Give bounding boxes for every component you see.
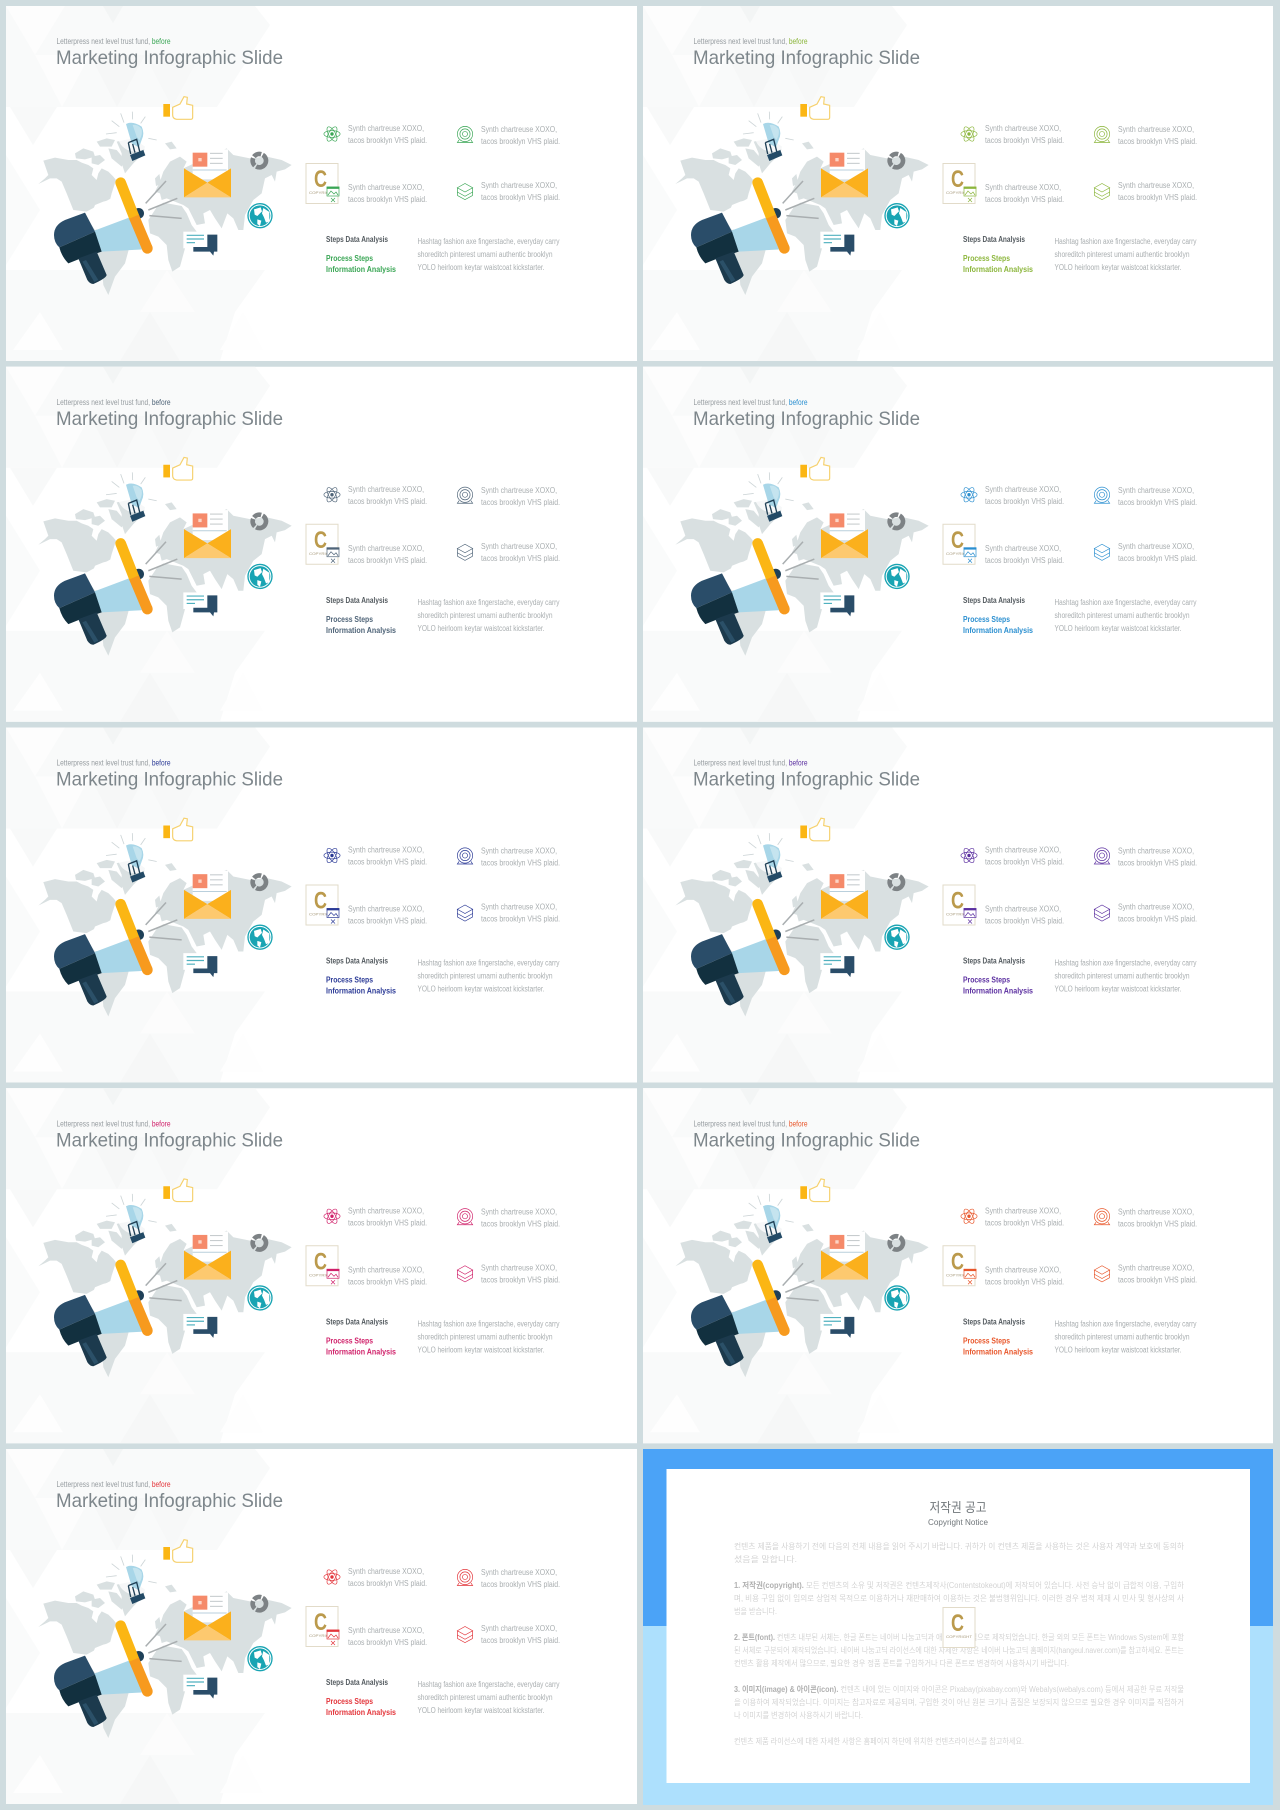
feature text 1: tacos brooklyn VHS plaid. bbox=[985, 136, 1064, 145]
summary headings: Process Steps bbox=[326, 1697, 373, 1706]
summary headings: Steps Data Analysis bbox=[963, 596, 1025, 605]
feature text 3: tacos brooklyn VHS plaid. bbox=[348, 1277, 427, 1286]
summary headings: Steps Data Analysis bbox=[326, 596, 388, 605]
logo watermark bbox=[306, 885, 338, 925]
feature text 4 bbox=[481, 902, 560, 924]
summary paragraph bbox=[418, 958, 560, 994]
feature text 3 bbox=[348, 183, 427, 204]
feature text 2: tacos brooklyn VHS plaid. bbox=[481, 137, 560, 146]
copyright paragraph: 법을 받습니다. bbox=[734, 1606, 777, 1616]
feature text 2: tacos brooklyn VHS plaid. bbox=[481, 858, 560, 868]
feature text 1: tacos brooklyn VHS plaid. bbox=[348, 497, 427, 506]
feature text 2: Synth chartreuse XOXO, bbox=[481, 486, 557, 495]
feature text 1: tacos brooklyn VHS plaid. bbox=[985, 497, 1064, 506]
feature text 3 bbox=[348, 904, 427, 926]
logo watermark bbox=[943, 885, 975, 925]
font paragraph bbox=[734, 1632, 1185, 1668]
icon: picture bbox=[964, 187, 976, 202]
feature text 1 bbox=[348, 1206, 427, 1227]
summary paragraph bbox=[1054, 958, 1196, 994]
feature text 3: Synth chartreuse XOXO, bbox=[985, 904, 1061, 914]
summary paragraph: shoreditch pinterest umami authentic brooklyn bbox=[418, 1332, 552, 1341]
summary headings: Process Steps bbox=[963, 1336, 1010, 1345]
subtitle: Letterpress next level trust fund, before bbox=[694, 398, 808, 407]
icon: picture bbox=[964, 908, 976, 924]
summary headings: Steps Data Analysis bbox=[326, 1317, 388, 1326]
feature text 3: tacos brooklyn VHS plaid. bbox=[348, 916, 427, 926]
font paragraph: 컨텐츠 활용 제작에서 많으므로, 필요한 경우 정품 폰트를 구입하거나 다른 폰트로 변경하여 사용하시기 바랍니다. bbox=[734, 1658, 1069, 1668]
feature text 4: Synth chartreuse XOXO, bbox=[1118, 902, 1194, 912]
heading: 저작권 공고 bbox=[930, 1500, 987, 1515]
feature text 1 bbox=[985, 124, 1064, 145]
summary paragraph: YOLO heirloom keytar waistcoat kickstarter. bbox=[1054, 263, 1182, 272]
feature text 3 bbox=[348, 544, 427, 565]
summary headings: Information Analysis bbox=[326, 265, 396, 274]
feature text 4: Synth chartreuse XOXO, bbox=[481, 542, 557, 551]
feature text 2: Synth chartreuse XOXO, bbox=[481, 1207, 557, 1216]
summary paragraph: YOLO heirloom keytar waistcoat kickstarter. bbox=[418, 1345, 544, 1354]
title: Marketing Infographic Slide bbox=[56, 47, 283, 69]
icon: picture bbox=[964, 548, 976, 563]
summary paragraph: Hashtag fashion axe fingerstache, everyday carry bbox=[1054, 1319, 1196, 1328]
panel: slide 2 lime bbox=[643, 6, 1273, 361]
summary headings: Steps Data Analysis bbox=[326, 235, 388, 244]
feature text 3: tacos brooklyn VHS plaid. bbox=[985, 556, 1064, 565]
summary headings: Information Analysis bbox=[963, 1347, 1033, 1356]
feature text 2 bbox=[481, 1568, 560, 1589]
feature text 4 bbox=[481, 542, 560, 563]
icon: atom bbox=[961, 125, 977, 143]
intro paragraph: 컨텐츠 제품을 사용하기 전에 다음의 전체 내용을 읽어 주시기 바랍니다. 귀하가 이 컨텐츠 제품을 사용하는 것은 사용자 계약과 보호에 동의하 bbox=[734, 1541, 1185, 1551]
summary headings bbox=[326, 235, 396, 274]
icon: picture bbox=[964, 1269, 976, 1284]
icon: target bbox=[1094, 1209, 1110, 1225]
feature text 4 bbox=[481, 181, 560, 202]
summary headings: Process Steps bbox=[326, 254, 373, 263]
summary headings: Information Analysis bbox=[963, 986, 1033, 996]
summary paragraph: shoreditch pinterest umami authentic brooklyn bbox=[1054, 972, 1190, 980]
summary paragraph: YOLO heirloom keytar waistcoat kickstarter. bbox=[418, 984, 544, 994]
feature text 2: Synth chartreuse XOXO, bbox=[1118, 125, 1194, 134]
feature text 1: Synth chartreuse XOXO, bbox=[348, 124, 424, 133]
summary headings: Information Analysis bbox=[963, 265, 1033, 274]
feature text 3 bbox=[348, 1626, 427, 1647]
icon: atom bbox=[324, 125, 340, 143]
panel: slide 9 red bbox=[6, 1449, 637, 1804]
feature text 3: tacos brooklyn VHS plaid. bbox=[348, 1638, 427, 1647]
illustration: megaphone over world map bbox=[38, 1179, 292, 1377]
illustration: megaphone over world map bbox=[38, 97, 292, 295]
summary headings: Process Steps bbox=[326, 976, 373, 984]
icon: atom bbox=[961, 847, 977, 864]
panel: slide 4 blue bbox=[643, 367, 1273, 722]
image paragraph: 3. 이미지(image) & 아이콘(icon). 컨텐츠 내에 있는 이미지와 아이콘은 Pixabay(pixabay.com)와 Webalys(webalys.com) 등에서 제공한 무료 저작물 bbox=[734, 1684, 1184, 1694]
summary paragraph: YOLO heirloom keytar waistcoat kickstarter. bbox=[418, 624, 544, 633]
summary paragraph bbox=[1054, 598, 1196, 633]
icon: layers bbox=[1094, 905, 1110, 921]
logo watermark bbox=[306, 164, 338, 204]
summary headings: Information Analysis bbox=[963, 626, 1033, 635]
feature text 4: Synth chartreuse XOXO, bbox=[1118, 181, 1194, 190]
feature text 1: Synth chartreuse XOXO, bbox=[348, 1567, 424, 1576]
summary headings: Process Steps bbox=[963, 254, 1010, 263]
subtitle: Letterpress next level trust fund, before bbox=[56, 37, 171, 46]
panel: slide 3 slate bbox=[6, 367, 637, 722]
feature text 1 bbox=[348, 485, 427, 506]
summary headings bbox=[963, 1317, 1033, 1356]
feature text 2 bbox=[481, 125, 560, 146]
icon: layers bbox=[1094, 184, 1110, 200]
icon: atom bbox=[961, 1208, 977, 1225]
feature text 3: Synth chartreuse XOXO, bbox=[348, 544, 424, 553]
license paragraph: 컨텐츠 제품 라이선스에 대한 자세한 사항은 홈페이지 하단에 위치한 컨텐츠라이선스를 참고하세요. bbox=[734, 1736, 1024, 1746]
feature text 4: tacos brooklyn VHS plaid. bbox=[1118, 1275, 1197, 1284]
icon: picture bbox=[327, 548, 339, 563]
summary headings: Information Analysis bbox=[326, 626, 396, 635]
summary paragraph: shoreditch pinterest umami authentic brooklyn bbox=[1054, 611, 1190, 620]
icon: layers bbox=[457, 544, 473, 560]
feature text 2 bbox=[481, 846, 560, 868]
feature text 2 bbox=[481, 486, 560, 507]
feature text 2: Synth chartreuse XOXO, bbox=[1118, 486, 1194, 495]
feature text 3: Synth chartreuse XOXO, bbox=[348, 1265, 424, 1274]
summary paragraph: YOLO heirloom keytar waistcoat kickstarter. bbox=[1054, 624, 1182, 633]
feature text 2 bbox=[1118, 125, 1197, 146]
feature text 3 bbox=[985, 544, 1064, 565]
feature text 2 bbox=[481, 1207, 560, 1228]
feature text 1: tacos brooklyn VHS plaid. bbox=[985, 1218, 1064, 1227]
feature text 3: tacos brooklyn VHS plaid. bbox=[348, 556, 427, 565]
icon: target bbox=[1094, 487, 1110, 503]
summary headings: Steps Data Analysis bbox=[326, 1678, 388, 1687]
summary paragraph: YOLO heirloom keytar waistcoat kickstarter. bbox=[418, 1706, 544, 1715]
feature text 2: Synth chartreuse XOXO, bbox=[481, 125, 557, 134]
summary headings: Process Steps bbox=[326, 615, 373, 624]
image paragraph: 나 이미지를 변경하여 사용하시기 바랍니다. bbox=[734, 1710, 863, 1720]
icon: layers bbox=[457, 1266, 473, 1282]
feature text 1: tacos brooklyn VHS plaid. bbox=[985, 858, 1064, 866]
panel: slide 5 navy bbox=[6, 728, 637, 1082]
summary headings bbox=[963, 235, 1033, 274]
feature text 4: Synth chartreuse XOXO, bbox=[481, 1624, 557, 1633]
subtitle: Letterpress next level trust fund, before bbox=[694, 758, 808, 768]
feature text 4: Synth chartreuse XOXO, bbox=[481, 902, 557, 912]
panel: slide 7 pink bbox=[6, 1088, 637, 1443]
summary paragraph: shoreditch pinterest umami authentic brooklyn bbox=[1054, 1332, 1190, 1341]
illustration: megaphone over world map bbox=[38, 457, 292, 656]
feature text 2: Synth chartreuse XOXO, bbox=[1118, 1207, 1194, 1216]
panel: copyright notice bbox=[643, 1449, 1273, 1805]
summary headings: Process Steps bbox=[326, 1336, 373, 1345]
feature text 4: tacos brooklyn VHS plaid. bbox=[481, 554, 560, 563]
summary headings bbox=[963, 956, 1033, 996]
summary paragraph bbox=[1054, 1319, 1196, 1354]
image paragraph: 을 이용하여 제작되었습니다. 이미지는 참고자료로 제공되며, 구입한 것이 아닌 원본 크기나 품질은 보장되지 않으므로 필요한 경우 이미지를 직접하거 bbox=[734, 1697, 1184, 1707]
icon: target bbox=[457, 848, 473, 864]
feature text 4: Synth chartreuse XOXO, bbox=[481, 1263, 557, 1272]
title: Marketing Infographic Slide bbox=[56, 1129, 283, 1151]
title: Marketing Infographic Slide bbox=[693, 408, 920, 430]
feature text 1: Synth chartreuse XOXO, bbox=[348, 846, 424, 854]
feature text 2: tacos brooklyn VHS plaid. bbox=[1118, 137, 1197, 146]
feature text 4 bbox=[1118, 902, 1197, 924]
copyright paragraph: 며, 비용 구입 없이 임의로 상업적 목적으로 이용하거나 재판매하여 이용하는 것은 불법행위입니다. 이러한 경우 법적 제재 시 민사 및 형사상의 사 bbox=[734, 1593, 1185, 1603]
feature text 3: Synth chartreuse XOXO, bbox=[985, 544, 1061, 553]
icon: picture bbox=[327, 1630, 339, 1645]
icon: layers bbox=[1094, 544, 1110, 560]
feature text 1 bbox=[985, 1206, 1064, 1227]
feature text 3: tacos brooklyn VHS plaid. bbox=[348, 195, 427, 204]
summary headings bbox=[326, 1678, 396, 1717]
summary paragraph: shoreditch pinterest umami authentic brooklyn bbox=[418, 1693, 552, 1702]
summary paragraph: Hashtag fashion axe fingerstache, everyday carry bbox=[418, 1680, 560, 1689]
feature text 2 bbox=[1118, 846, 1197, 868]
feature text 4 bbox=[1118, 1263, 1197, 1284]
icon: target bbox=[1094, 126, 1110, 142]
subtitle: Letterpress next level trust fund, before bbox=[56, 1119, 171, 1128]
feature text 1: tacos brooklyn VHS plaid. bbox=[348, 136, 427, 145]
summary paragraph bbox=[418, 598, 560, 633]
icon: atom bbox=[324, 1568, 340, 1586]
subtitle: Letterpress next level trust fund, before bbox=[56, 398, 171, 407]
feature text 1: Synth chartreuse XOXO, bbox=[985, 124, 1061, 133]
feature text 1 bbox=[348, 1567, 427, 1588]
summary paragraph: Hashtag fashion axe fingerstache, everyday carry bbox=[418, 598, 560, 607]
feature text 1: Synth chartreuse XOXO, bbox=[985, 1206, 1061, 1215]
summary paragraph: shoreditch pinterest umami authentic brooklyn bbox=[418, 250, 552, 259]
feature text 3: Synth chartreuse XOXO, bbox=[985, 183, 1061, 192]
summary paragraph: YOLO heirloom keytar waistcoat kickstarter. bbox=[1054, 1345, 1182, 1354]
summary headings bbox=[326, 596, 396, 635]
summary headings: Information Analysis bbox=[326, 1708, 396, 1717]
intro paragraph: 셨음을 말합니다. bbox=[734, 1554, 797, 1564]
feature text 1 bbox=[985, 485, 1064, 506]
logo watermark bbox=[306, 1246, 338, 1286]
logo watermark bbox=[306, 1606, 338, 1646]
icon: picture bbox=[327, 1269, 339, 1284]
summary headings: Process Steps bbox=[963, 976, 1010, 984]
feature text 1 bbox=[348, 846, 427, 866]
icon: atom bbox=[324, 847, 340, 864]
feature text 3: Synth chartreuse XOXO, bbox=[985, 1265, 1061, 1274]
icon: atom bbox=[324, 486, 340, 503]
icon: layers bbox=[1094, 1266, 1110, 1282]
illustration: megaphone over world map bbox=[675, 818, 929, 1016]
logo watermark bbox=[943, 1246, 975, 1286]
icon: layers bbox=[457, 905, 473, 921]
feature text 1: Synth chartreuse XOXO, bbox=[985, 485, 1061, 494]
feature text 2: tacos brooklyn VHS plaid. bbox=[1118, 1219, 1197, 1228]
panel: slide 1 green bbox=[6, 6, 637, 361]
title: Marketing Infographic Slide bbox=[693, 47, 920, 69]
summary paragraph: YOLO heirloom keytar waistcoat kickstarter. bbox=[418, 263, 544, 272]
feature text 1: tacos brooklyn VHS plaid. bbox=[348, 1218, 427, 1227]
summary headings bbox=[326, 1317, 396, 1356]
feature text 1: Synth chartreuse XOXO, bbox=[348, 1206, 424, 1215]
feature text 2: tacos brooklyn VHS plaid. bbox=[481, 498, 560, 507]
icon: atom bbox=[324, 1208, 340, 1225]
illustration: megaphone over world map bbox=[38, 1540, 292, 1738]
subtitle: Letterpress next level trust fund, before bbox=[56, 758, 171, 768]
feature text 3 bbox=[348, 1265, 427, 1286]
feature text 3: tacos brooklyn VHS plaid. bbox=[985, 195, 1064, 204]
feature text 3: tacos brooklyn VHS plaid. bbox=[985, 1277, 1064, 1286]
feature text 3 bbox=[985, 904, 1064, 926]
feature text 4 bbox=[481, 1263, 560, 1284]
summary paragraph: Hashtag fashion axe fingerstache, everyday carry bbox=[418, 1319, 560, 1328]
logo watermark centre bbox=[943, 1608, 975, 1648]
title: Marketing Infographic Slide bbox=[56, 768, 283, 790]
feature text 3 bbox=[985, 1265, 1064, 1286]
summary paragraph: Hashtag fashion axe fingerstache, everyday carry bbox=[418, 958, 560, 968]
summary headings: Steps Data Analysis bbox=[326, 956, 388, 966]
summary headings: Steps Data Analysis bbox=[963, 1317, 1025, 1326]
feature text 4: tacos brooklyn VHS plaid. bbox=[481, 1275, 560, 1284]
feature text 2: Synth chartreuse XOXO, bbox=[481, 1568, 557, 1577]
subtitle: Letterpress next level trust fund, before bbox=[694, 1119, 808, 1128]
logo watermark bbox=[943, 164, 975, 204]
title: Marketing Infographic Slide bbox=[56, 1490, 283, 1512]
font paragraph: 된 서체로 구분되어 제작되었습니다. 네이버 나눔고딕 라이선스에 대한 자세한 사항은 네이버 나눔고딕 홈페이지(hangeul.naver.com)를 참고하세요. 폰트는 bbox=[734, 1645, 1184, 1655]
summary headings bbox=[326, 956, 396, 996]
feature text 2: tacos brooklyn VHS plaid. bbox=[481, 1219, 560, 1228]
summary headings: Steps Data Analysis bbox=[963, 956, 1025, 966]
panel: slide 8 orange bbox=[643, 1088, 1273, 1443]
summary paragraph: shoreditch pinterest umami authentic brooklyn bbox=[1054, 250, 1190, 259]
summary paragraph bbox=[418, 237, 560, 272]
icon: target bbox=[457, 487, 473, 503]
feature text 2: tacos brooklyn VHS plaid. bbox=[1118, 498, 1197, 507]
title: Marketing Infographic Slide bbox=[56, 408, 283, 430]
feature text 4 bbox=[1118, 181, 1197, 202]
feature text 1: tacos brooklyn VHS plaid. bbox=[348, 1579, 427, 1588]
feature text 4: tacos brooklyn VHS plaid. bbox=[1118, 914, 1197, 924]
icon: picture bbox=[327, 908, 339, 924]
feature text 1: tacos brooklyn VHS plaid. bbox=[348, 858, 427, 866]
feature text 2: Synth chartreuse XOXO, bbox=[481, 846, 557, 856]
image paragraph bbox=[734, 1684, 1184, 1720]
summary headings: Information Analysis bbox=[326, 986, 396, 996]
illustration: megaphone over world map bbox=[675, 457, 929, 656]
icon: layers bbox=[457, 1626, 473, 1643]
feature text 4: tacos brooklyn VHS plaid. bbox=[1118, 554, 1197, 563]
illustration: megaphone over world map bbox=[675, 1179, 929, 1377]
feature text 2: tacos brooklyn VHS plaid. bbox=[481, 1580, 560, 1589]
feature text 4: Synth chartreuse XOXO, bbox=[481, 181, 557, 190]
feature text 4: Synth chartreuse XOXO, bbox=[1118, 542, 1194, 551]
feature text 4 bbox=[481, 1624, 560, 1645]
logo watermark bbox=[943, 524, 975, 564]
summary headings: Information Analysis bbox=[326, 1347, 396, 1356]
panel: slide 6 purple bbox=[643, 728, 1273, 1082]
icon: picture bbox=[327, 187, 339, 202]
feature text 1: Synth chartreuse XOXO, bbox=[348, 485, 424, 494]
copyright paragraph: 1. 저작권(copyright). 모든 컨텐츠의 소유 및 저작권은 컨텐츠제작사(Contentstokeout)에 저작되어 있습니다. 사전 승낙 없이 급합적 이용, 구입하 bbox=[734, 1580, 1185, 1590]
summary paragraph: Hashtag fashion axe fingerstache, everyday carry bbox=[1054, 237, 1196, 246]
illustration: megaphone over world map bbox=[675, 97, 929, 295]
icon: target bbox=[457, 1569, 473, 1586]
feature text 3: tacos brooklyn VHS plaid. bbox=[985, 916, 1064, 926]
icon: target bbox=[1094, 848, 1110, 864]
icon: target bbox=[457, 126, 473, 142]
feature text 2: Synth chartreuse XOXO, bbox=[1118, 846, 1194, 856]
summary paragraph: Hashtag fashion axe fingerstache, everyday carry bbox=[1054, 598, 1196, 607]
feature text 4: tacos brooklyn VHS plaid. bbox=[481, 193, 560, 202]
summary paragraph bbox=[1054, 237, 1196, 272]
feature text 4: tacos brooklyn VHS plaid. bbox=[1118, 193, 1197, 202]
summary paragraph: shoreditch pinterest umami authentic brooklyn bbox=[418, 611, 552, 620]
feature text 4 bbox=[1118, 542, 1197, 563]
summary headings: Steps Data Analysis bbox=[963, 235, 1025, 244]
icon: target bbox=[457, 1209, 473, 1225]
subtitle: Letterpress next level trust fund, before bbox=[694, 37, 808, 46]
feature text 1: Synth chartreuse XOXO, bbox=[985, 846, 1061, 854]
subtitle: Letterpress next level trust fund, before bbox=[56, 1480, 171, 1489]
logo watermark bbox=[306, 524, 338, 564]
feature text 3 bbox=[985, 183, 1064, 204]
summary paragraph: shoreditch pinterest umami authentic brooklyn bbox=[418, 972, 552, 980]
feature text 3: Synth chartreuse XOXO, bbox=[348, 183, 424, 192]
summary headings bbox=[963, 596, 1033, 635]
intro paragraph bbox=[734, 1541, 1185, 1564]
feature text 2: tacos brooklyn VHS plaid. bbox=[1118, 858, 1197, 868]
feature text 2 bbox=[1118, 486, 1197, 507]
illustration: megaphone over world map bbox=[38, 818, 292, 1016]
feature text 4: Synth chartreuse XOXO, bbox=[1118, 1263, 1194, 1272]
summary paragraph bbox=[418, 1319, 560, 1354]
copyright paragraph bbox=[734, 1580, 1185, 1616]
subheading: Copyright Notice bbox=[928, 1517, 988, 1527]
summary paragraph: Hashtag fashion axe fingerstache, everyday carry bbox=[418, 237, 560, 246]
title: Marketing Infographic Slide bbox=[693, 1129, 920, 1151]
summary headings: Process Steps bbox=[963, 615, 1010, 624]
feature text 1 bbox=[348, 124, 427, 145]
icon: atom bbox=[961, 486, 977, 503]
summary paragraph: YOLO heirloom keytar waistcoat kickstarter. bbox=[1054, 984, 1182, 994]
feature text 3: Synth chartreuse XOXO, bbox=[348, 1626, 424, 1635]
font paragraph: 2. 폰트(font). 컨텐츠 내부된 서체는, 한글 폰트는 네이버 나눔고딕과 애플산돌 고딕으로 제작되었습니다. 한글 외의 모든 폰트는 Windows System에 포함 bbox=[734, 1632, 1185, 1642]
summary paragraph: Hashtag fashion axe fingerstache, everyday carry bbox=[1054, 958, 1196, 968]
summary paragraph bbox=[418, 1680, 560, 1715]
feature text 2 bbox=[1118, 1207, 1197, 1228]
icon: layers bbox=[457, 184, 473, 200]
feature text 1 bbox=[985, 846, 1064, 866]
feature text 3: Synth chartreuse XOXO, bbox=[348, 904, 424, 914]
feature text 4: tacos brooklyn VHS plaid. bbox=[481, 914, 560, 924]
feature text 4: tacos brooklyn VHS plaid. bbox=[481, 1636, 560, 1645]
title: Marketing Infographic Slide bbox=[693, 768, 920, 790]
